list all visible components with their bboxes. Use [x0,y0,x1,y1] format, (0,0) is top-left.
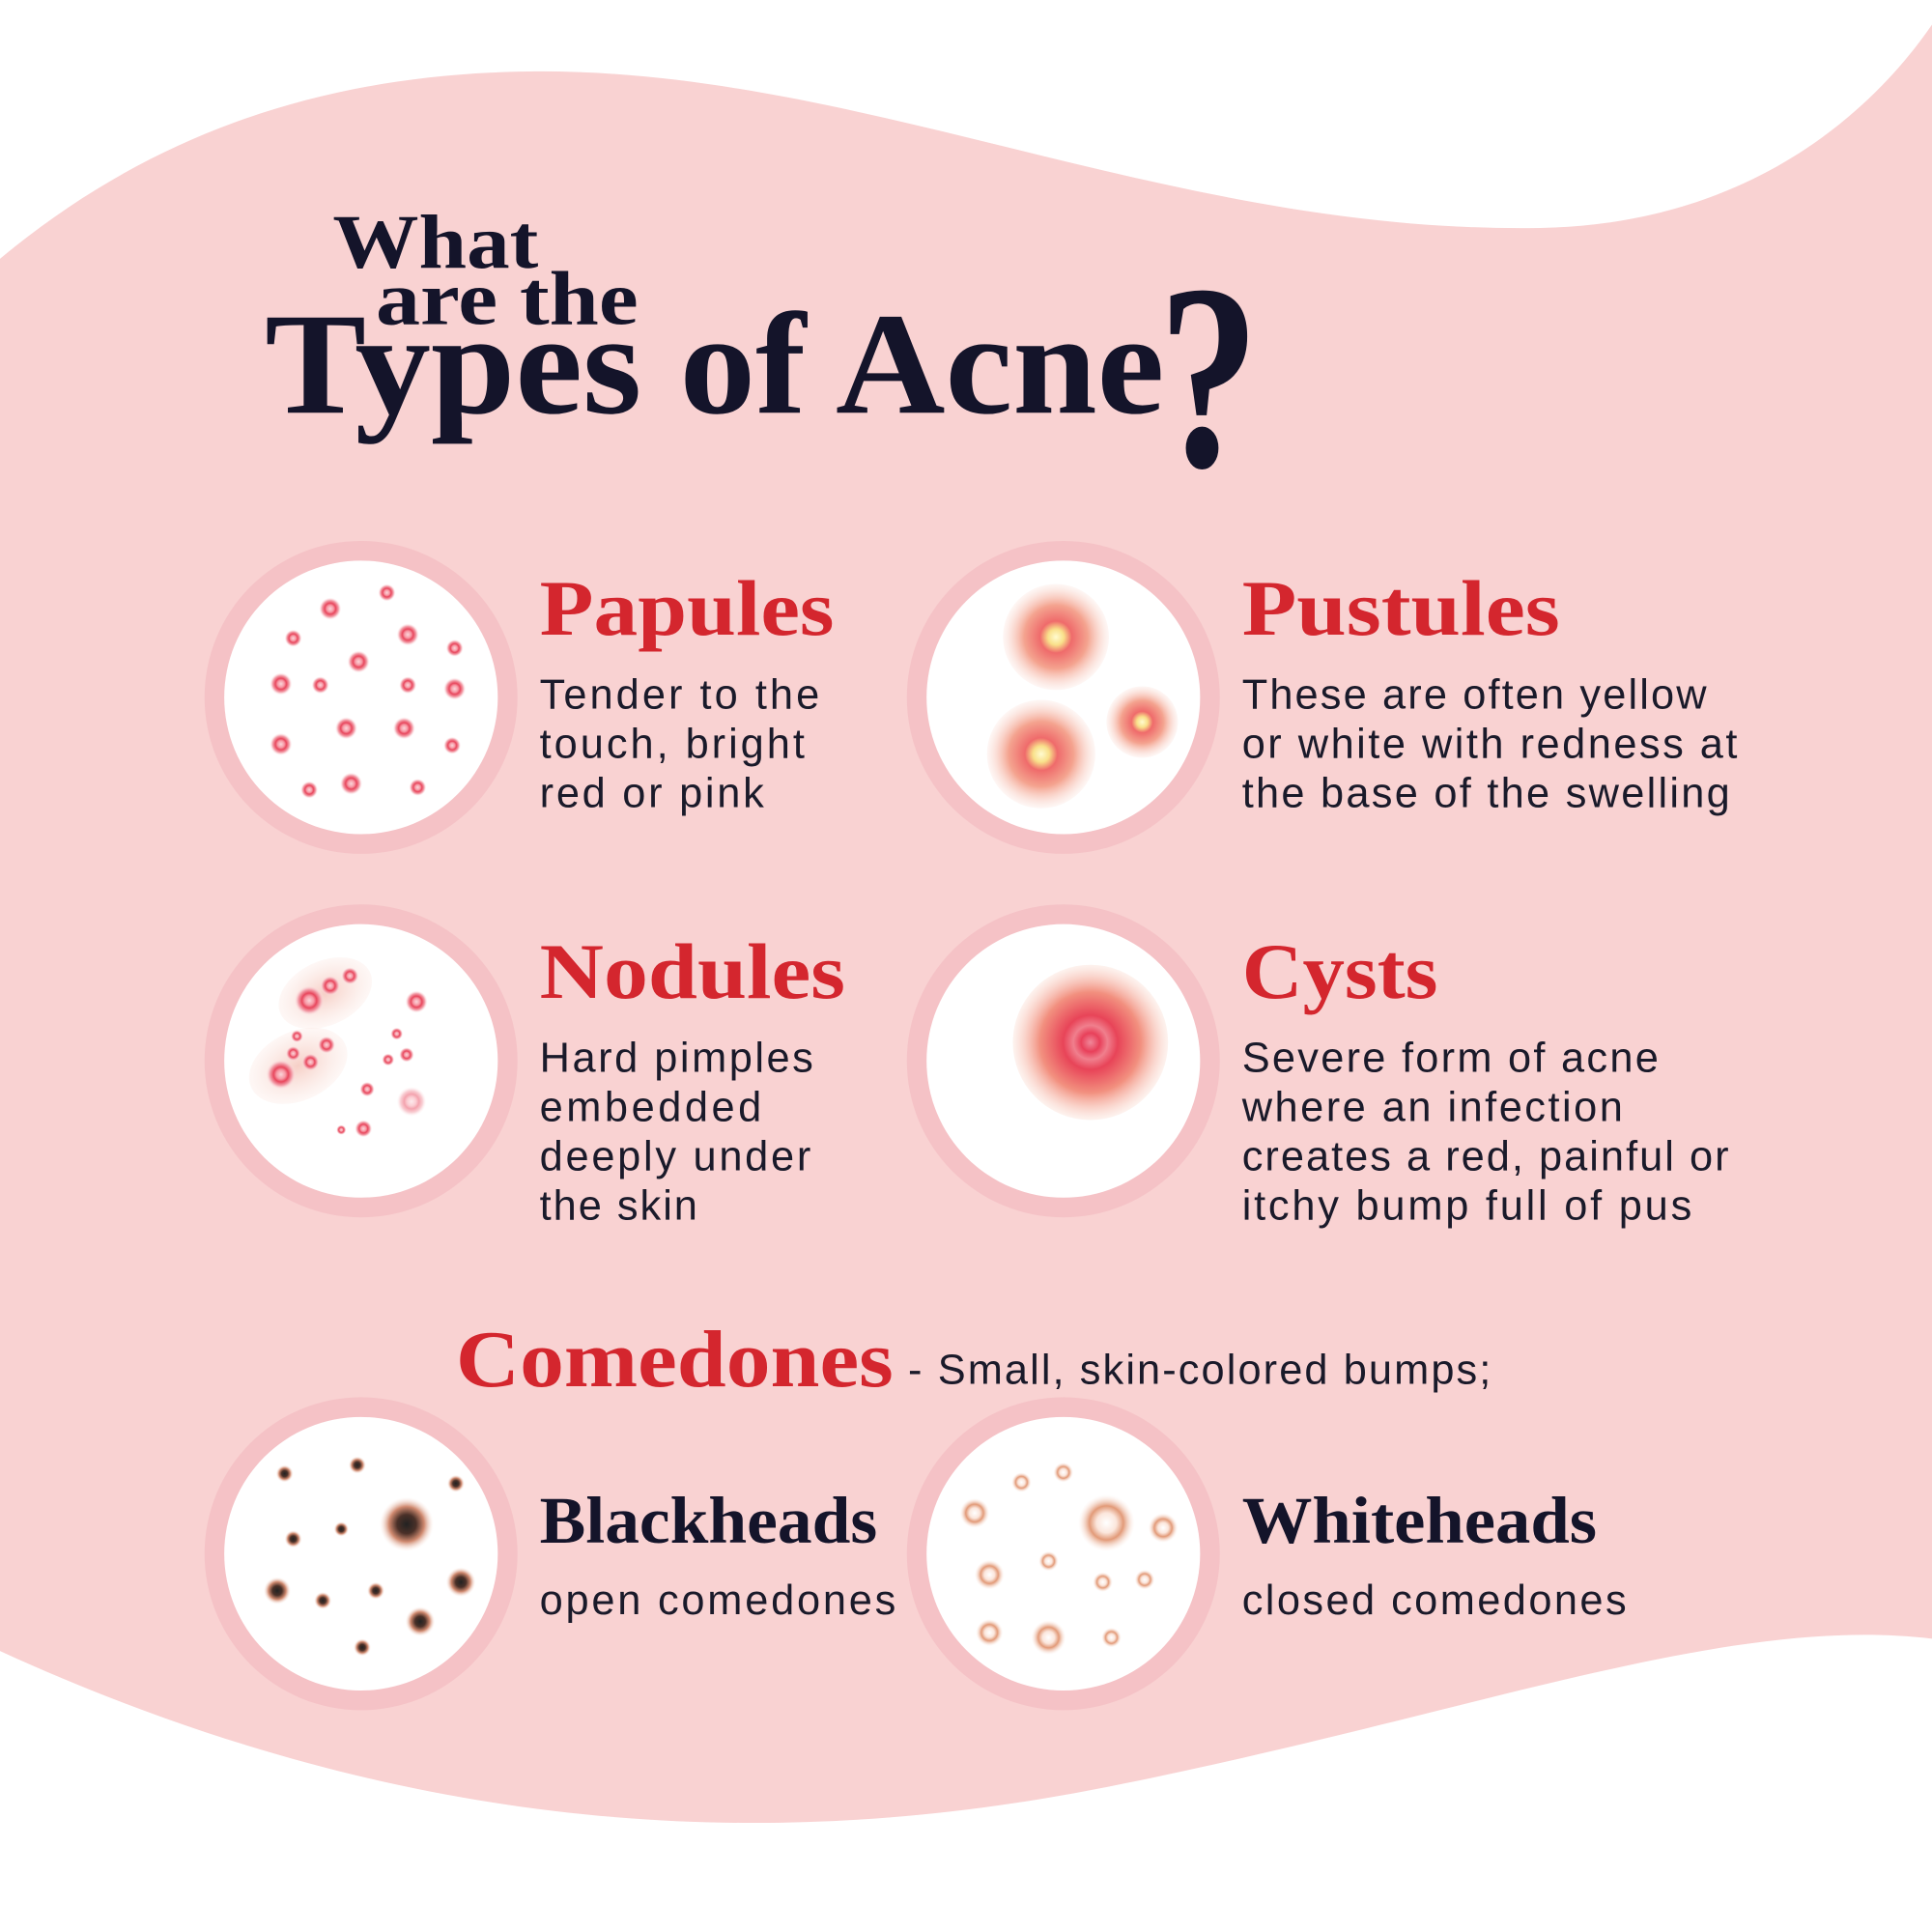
panel: cysts: where an infection [1241,1085,1623,1131]
title: ? [1158,231,1260,524]
panel: pustules: or white with redness at [1242,721,1737,767]
title [265,201,1260,524]
panel: nodules: Nodules [540,927,845,1015]
panel: blackheads: Blackheads [540,1484,877,1557]
panel: whiteheads: Whiteheads [1242,1484,1597,1557]
panel: whiteheads [907,1397,1627,1710]
panel: cysts: Severe form of acne [1242,1036,1659,1082]
panel: papules: Tender to the [540,671,819,718]
title: are the [376,257,639,341]
panel: papules: red or pink [540,770,764,816]
panel: cysts: Cysts [1242,927,1438,1015]
panel: blackheads [205,1397,895,1710]
panel: nodules: deeply under [540,1134,810,1180]
panel: cysts: creates a red, painful or [1242,1134,1729,1180]
panel: nodules: Hard pimples [540,1036,813,1082]
title: What [332,201,538,285]
heading: comedones: - Small, skin-colored bumps; [908,1347,1491,1393]
panel: papules [205,541,835,854]
panel: papules: touch, bright [540,721,805,767]
panel: pustules: These are often yellow [1242,671,1707,718]
panel: cysts [907,904,1729,1230]
panel: papules: Papules [540,564,835,652]
panel: pustules: the base of the swelling [1242,770,1730,816]
panel: nodules [205,904,845,1230]
panel: cysts: itchy bump full of pus [1242,1183,1691,1230]
title: Types of Acne [265,283,1164,444]
panel: blackheads: open comedones [540,1577,895,1624]
panel: whiteheads: closed comedones [1242,1577,1627,1624]
panel: nodules: embedded [540,1085,761,1131]
heading: comedones: Comedones [456,1315,894,1405]
panel: pustules: Pustules [1242,564,1560,652]
panel: nodules: the skin [540,1183,697,1230]
heading: comedones [456,1315,1491,1405]
panel: pustules [907,541,1737,854]
